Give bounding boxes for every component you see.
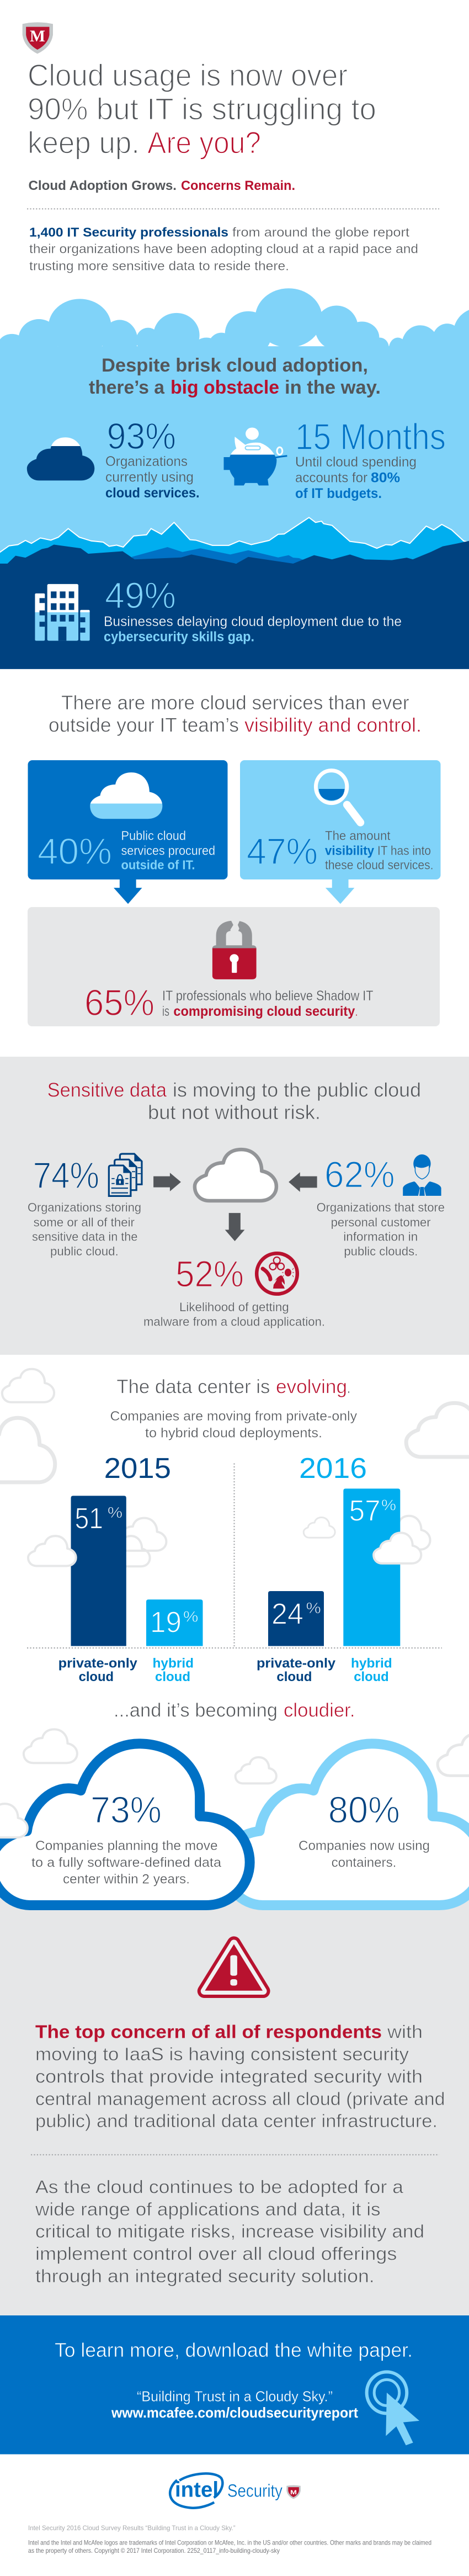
report title and link: “Building Trust in a Cloudy Sky.” <box>137 2388 333 2405</box>
icon: cloud <box>27 437 94 480</box>
logo: Intel Security: intel <box>175 2478 218 2502</box>
stat: 62%: information in <box>343 1230 418 1243</box>
text: top concern: with <box>387 2022 423 2042</box>
stat: 73%: center within 2 years. <box>63 1872 190 1887</box>
text: conclusion: As the cloud continues to be adopted for a <box>35 2176 404 2197</box>
cloud: 73% software-defined <box>0 1743 250 1905</box>
small cloud over big cloud <box>0 1804 28 1837</box>
bar: 2015 private-only 51%: 51 <box>75 1502 103 1535</box>
intro paragraph: from around the globe report <box>232 225 410 239</box>
card: 47% visibility: The amount <box>325 828 391 842</box>
stat: 74%: public cloud. <box>50 1244 119 1258</box>
year label: 2016: 2016 <box>299 1453 367 1485</box>
heading: visibility and control: There are more cloud services than ever <box>61 691 409 714</box>
stat: 62%: public clouds. <box>344 1244 418 1258</box>
icon: cursor with target rings <box>367 2372 419 2445</box>
bar: 2016 private-only 24%: % <box>306 1599 321 1616</box>
heading: visibility and control: visibility and control. <box>244 713 422 736</box>
card: 47% visibility: IT has into <box>377 843 431 857</box>
year label: 2015: 2015 <box>104 1453 171 1485</box>
stat: 73%: 73% <box>90 1789 162 1831</box>
stat: 15 months: 15 Months <box>295 416 446 458</box>
footnotes <box>28 2524 431 2554</box>
icon: cloud <box>90 772 162 819</box>
heading: sensitive data: is moving to the public cloud <box>173 1078 421 1101</box>
stat: 52%: 52% <box>175 1253 244 1295</box>
panel: call to action <box>0 2315 469 2455</box>
icon: warning triangle <box>204 1943 263 1991</box>
icon: business person <box>403 1154 441 1196</box>
title: Are you? <box>147 125 261 160</box>
bar labels: private-only <box>58 1656 137 1671</box>
intro paragraph: their organizations have been adopting cloud at a rapid pace and <box>29 241 418 256</box>
stat: 74%: sensitive data in the <box>32 1230 137 1243</box>
heading: evolving <box>116 1376 350 1397</box>
logo: McAfee shield <box>23 22 53 54</box>
stat: 74%: some or all of their <box>34 1215 135 1229</box>
icon: malware circle <box>257 1253 297 1294</box>
stat: 80%: 80% <box>328 1789 400 1831</box>
bar labels: cloud <box>354 1669 389 1684</box>
intro paragraph: 1,400 IT Security professionals <box>29 225 228 239</box>
card: 47% visibility: these cloud services. <box>325 857 434 872</box>
bar labels: cloud <box>276 1669 312 1684</box>
bar: 2016 private-only 24% <box>268 1591 324 1646</box>
arrow: left to cloud <box>289 1172 317 1192</box>
heading: visibility and control: outside your IT team’s <box>49 713 239 736</box>
panel: becoming cloudier <box>0 1699 469 1905</box>
stat: 52% <box>143 1253 325 1329</box>
footnotes: Intel Security 2016 Cloud Survey Results “Building Trust in a Cloudy Sky.” <box>28 2524 236 2532</box>
card: 65% shadow IT: is <box>162 1004 169 1019</box>
bar: 2016 hybrid 57%: % <box>381 1496 396 1513</box>
stat: 80%: Companies now using <box>299 1838 430 1853</box>
text: top concern: moving to IaaS is having consistent security <box>35 2044 409 2064</box>
bar: 2016 hybrid 57%: 57 <box>349 1494 381 1528</box>
arrow: right to cloud <box>153 1173 181 1191</box>
text: conclusion: implement control over all cloud offerings <box>35 2244 397 2264</box>
heading: visibility and control <box>49 691 422 736</box>
bar: 2015 private-only 51%: % <box>108 1504 122 1521</box>
bar labels: private-only <box>257 1656 336 1671</box>
bar: 2016 hybrid 57% <box>343 1488 400 1646</box>
stat: 74%: 74% <box>33 1155 99 1196</box>
stat: 80%: containers. <box>332 1856 396 1870</box>
heading: cloudier: ...and it’s becoming <box>114 1699 278 1721</box>
logo: Intel Security: M <box>290 2489 297 2496</box>
arrow: down from cloud <box>225 1213 244 1241</box>
mountains <box>0 517 469 669</box>
card: 47% visibility: visibility <box>325 843 374 857</box>
background clouds <box>0 1369 469 1566</box>
bar labels: hybrid <box>152 1656 194 1671</box>
sky cloud silhouette <box>0 288 469 568</box>
chart axes <box>27 1463 442 1648</box>
text: top concern: controls that provide integrated security with <box>35 2066 423 2087</box>
foreground clouds over bars <box>28 1533 421 1566</box>
title: keep up. <box>28 125 140 160</box>
logo: Intel Security: Security <box>227 2481 283 2501</box>
bar labels: hybrid <box>351 1656 392 1671</box>
text: conclusion: through an integrated security solution. <box>35 2266 375 2286</box>
intro paragraph: trusting more sensitive data to reside there. <box>29 258 289 273</box>
stat: 93%: currently using <box>105 470 194 485</box>
heading: sensitive data <box>47 1078 421 1123</box>
bar labels: cloud <box>79 1669 114 1684</box>
intro paragraph <box>29 225 418 273</box>
stat: 74% <box>28 1155 141 1258</box>
bar labels: cloud <box>155 1669 190 1684</box>
card: 65% shadow IT: compromising cloud security <box>173 1004 355 1019</box>
icon: piggy bank <box>223 427 287 485</box>
stat: 49%: Businesses delaying cloud deployment due to the <box>104 614 402 629</box>
subheading: Companies are moving from private-only <box>110 1409 357 1424</box>
cloud: 80% containers <box>223 1743 469 1905</box>
icon: magnifying glass <box>316 771 360 823</box>
panel: the data center is evolving <box>0 1369 469 1684</box>
heading: evolving: The data center is <box>116 1376 270 1397</box>
arrow: light box down <box>326 878 354 904</box>
icon: broken padlock <box>212 920 257 979</box>
bar: 2015 private-only 51% <box>71 1496 126 1646</box>
heading: evolving: evolving <box>276 1376 347 1397</box>
title: 90% but IT is struggling to <box>28 92 376 126</box>
panel: top concern <box>31 1943 445 2286</box>
footnotes: as the property of others. Copyright © 2017 Intel Corporation. 2252_0117_info-building-cloudy-sky <box>28 2547 280 2554</box>
stat: 73% <box>31 1789 222 1887</box>
stat: 52%: malware from a cloud application. <box>143 1315 325 1329</box>
bar: 2015 hybrid 19%: % <box>183 1608 198 1625</box>
card: 65% shadow IT <box>28 907 440 1026</box>
stat: 93%: Organizations <box>105 454 188 469</box>
text: conclusion <box>35 2176 424 2286</box>
bar: 2016 private-only 24%: 24 <box>271 1597 303 1630</box>
logo: McAfee shield: M <box>30 27 45 45</box>
text: top concern: central management across all cloud (private and <box>35 2089 445 2109</box>
panel: sensitive data <box>0 1057 469 1355</box>
stat: 62%: personal customer <box>331 1215 431 1229</box>
stat: 74%: Organizations storing <box>28 1201 141 1215</box>
panel: cloud adoption sky and mountains <box>0 288 469 669</box>
subheading <box>110 1409 357 1440</box>
card: 40% public cloud services: Public cloud <box>121 828 186 842</box>
report title and link <box>111 2388 358 2421</box>
panel: top concern grey background <box>0 1896 469 2315</box>
stat: 73%: to a fully software-defined data <box>31 1856 222 1870</box>
text: top concern <box>35 2022 445 2131</box>
text: top concern: The top concern of all of respondents <box>35 2022 382 2042</box>
stat: 15 months <box>295 416 446 501</box>
subtitle: Cloud Adoption Grows. <box>29 178 177 193</box>
card: 40% public cloud services: services procured <box>121 843 215 857</box>
heading: big obstacle <box>89 355 381 398</box>
subtitle: Concerns Remain. <box>181 178 295 193</box>
arrow: blue box down <box>114 878 142 904</box>
stat: 49% <box>104 575 402 645</box>
bar labels <box>58 1656 392 1684</box>
stat: 15 months: accounts for <box>295 470 367 486</box>
subtitle <box>29 178 295 193</box>
report title and link: www.mcafee.com/cloudsecurityreport <box>111 2404 358 2421</box>
heading: cloudier <box>114 1699 355 1721</box>
card: 40% public cloud services: outside of IT. <box>121 857 195 872</box>
stat: 62%: 62% <box>324 1154 395 1196</box>
card: 65% shadow IT: IT professionals who believe Shadow IT <box>162 988 373 1004</box>
icon: central cloud <box>195 1149 276 1201</box>
bar: 2015 hybrid 19%: 19 <box>150 1606 182 1639</box>
stat: 62%: Organizations that store <box>317 1201 445 1215</box>
heading: evolving: . <box>347 1376 350 1397</box>
stat: 62% <box>317 1154 445 1258</box>
heading: big obstacle: there’s a <box>89 377 165 398</box>
bar: 2015 hybrid 19% <box>146 1599 203 1646</box>
icon: office buildings <box>35 584 90 641</box>
text: conclusion: critical to mitigate risks, increase visibility and <box>35 2221 424 2241</box>
heading: sensitive data: Sensitive data <box>47 1078 167 1101</box>
card: 47% visibility <box>240 760 440 879</box>
panel: visibility and control <box>28 691 440 1026</box>
stat: 15 months: Until cloud spending <box>295 454 417 470</box>
stat: 15 months: of IT budgets. <box>295 486 382 501</box>
stat: 73%: Companies planning the move <box>35 1838 218 1853</box>
heading: big obstacle: big obstacle <box>170 377 279 398</box>
background clouds <box>24 1729 469 1783</box>
card: 65% shadow IT: . <box>355 1004 358 1019</box>
heading: sensitive data: but not without risk. <box>148 1101 321 1123</box>
heading: download: To learn more, download the white paper. <box>55 2339 413 2361</box>
stat: 52%: Likelihood of getting <box>179 1300 289 1314</box>
logo: Intel Security <box>170 2473 301 2508</box>
text: top concern: public) and traditional data center infrastructure. <box>35 2111 438 2131</box>
stat: 93%: cloud services. <box>105 485 200 501</box>
stat: 49%: 49% <box>105 575 176 617</box>
stat: 49%: cybersecurity skills gap. <box>104 629 254 645</box>
card: 40% public cloud services: 40% <box>38 831 112 872</box>
heading: big obstacle: in the way. <box>285 377 381 398</box>
card: 47% visibility: 47% <box>247 831 318 872</box>
heading: cloudier: cloudier. <box>284 1699 355 1721</box>
stat: 93% <box>105 416 200 501</box>
stat: 15 months: 80% <box>371 470 400 486</box>
title <box>28 58 376 160</box>
heading: big obstacle: Despite brisk cloud adoption, <box>102 355 368 376</box>
icon: secure documents <box>109 1154 142 1196</box>
subheading: to hybrid cloud deployments. <box>145 1425 322 1440</box>
stat: 80% <box>299 1789 430 1870</box>
title: Cloud usage is now over <box>28 58 348 93</box>
card: 65% shadow IT: 65% <box>84 982 154 1024</box>
card: 40% public cloud services <box>28 760 227 879</box>
stat: 93%: 93% <box>107 416 176 457</box>
text: conclusion: wide range of applications and data, it is <box>35 2199 381 2219</box>
